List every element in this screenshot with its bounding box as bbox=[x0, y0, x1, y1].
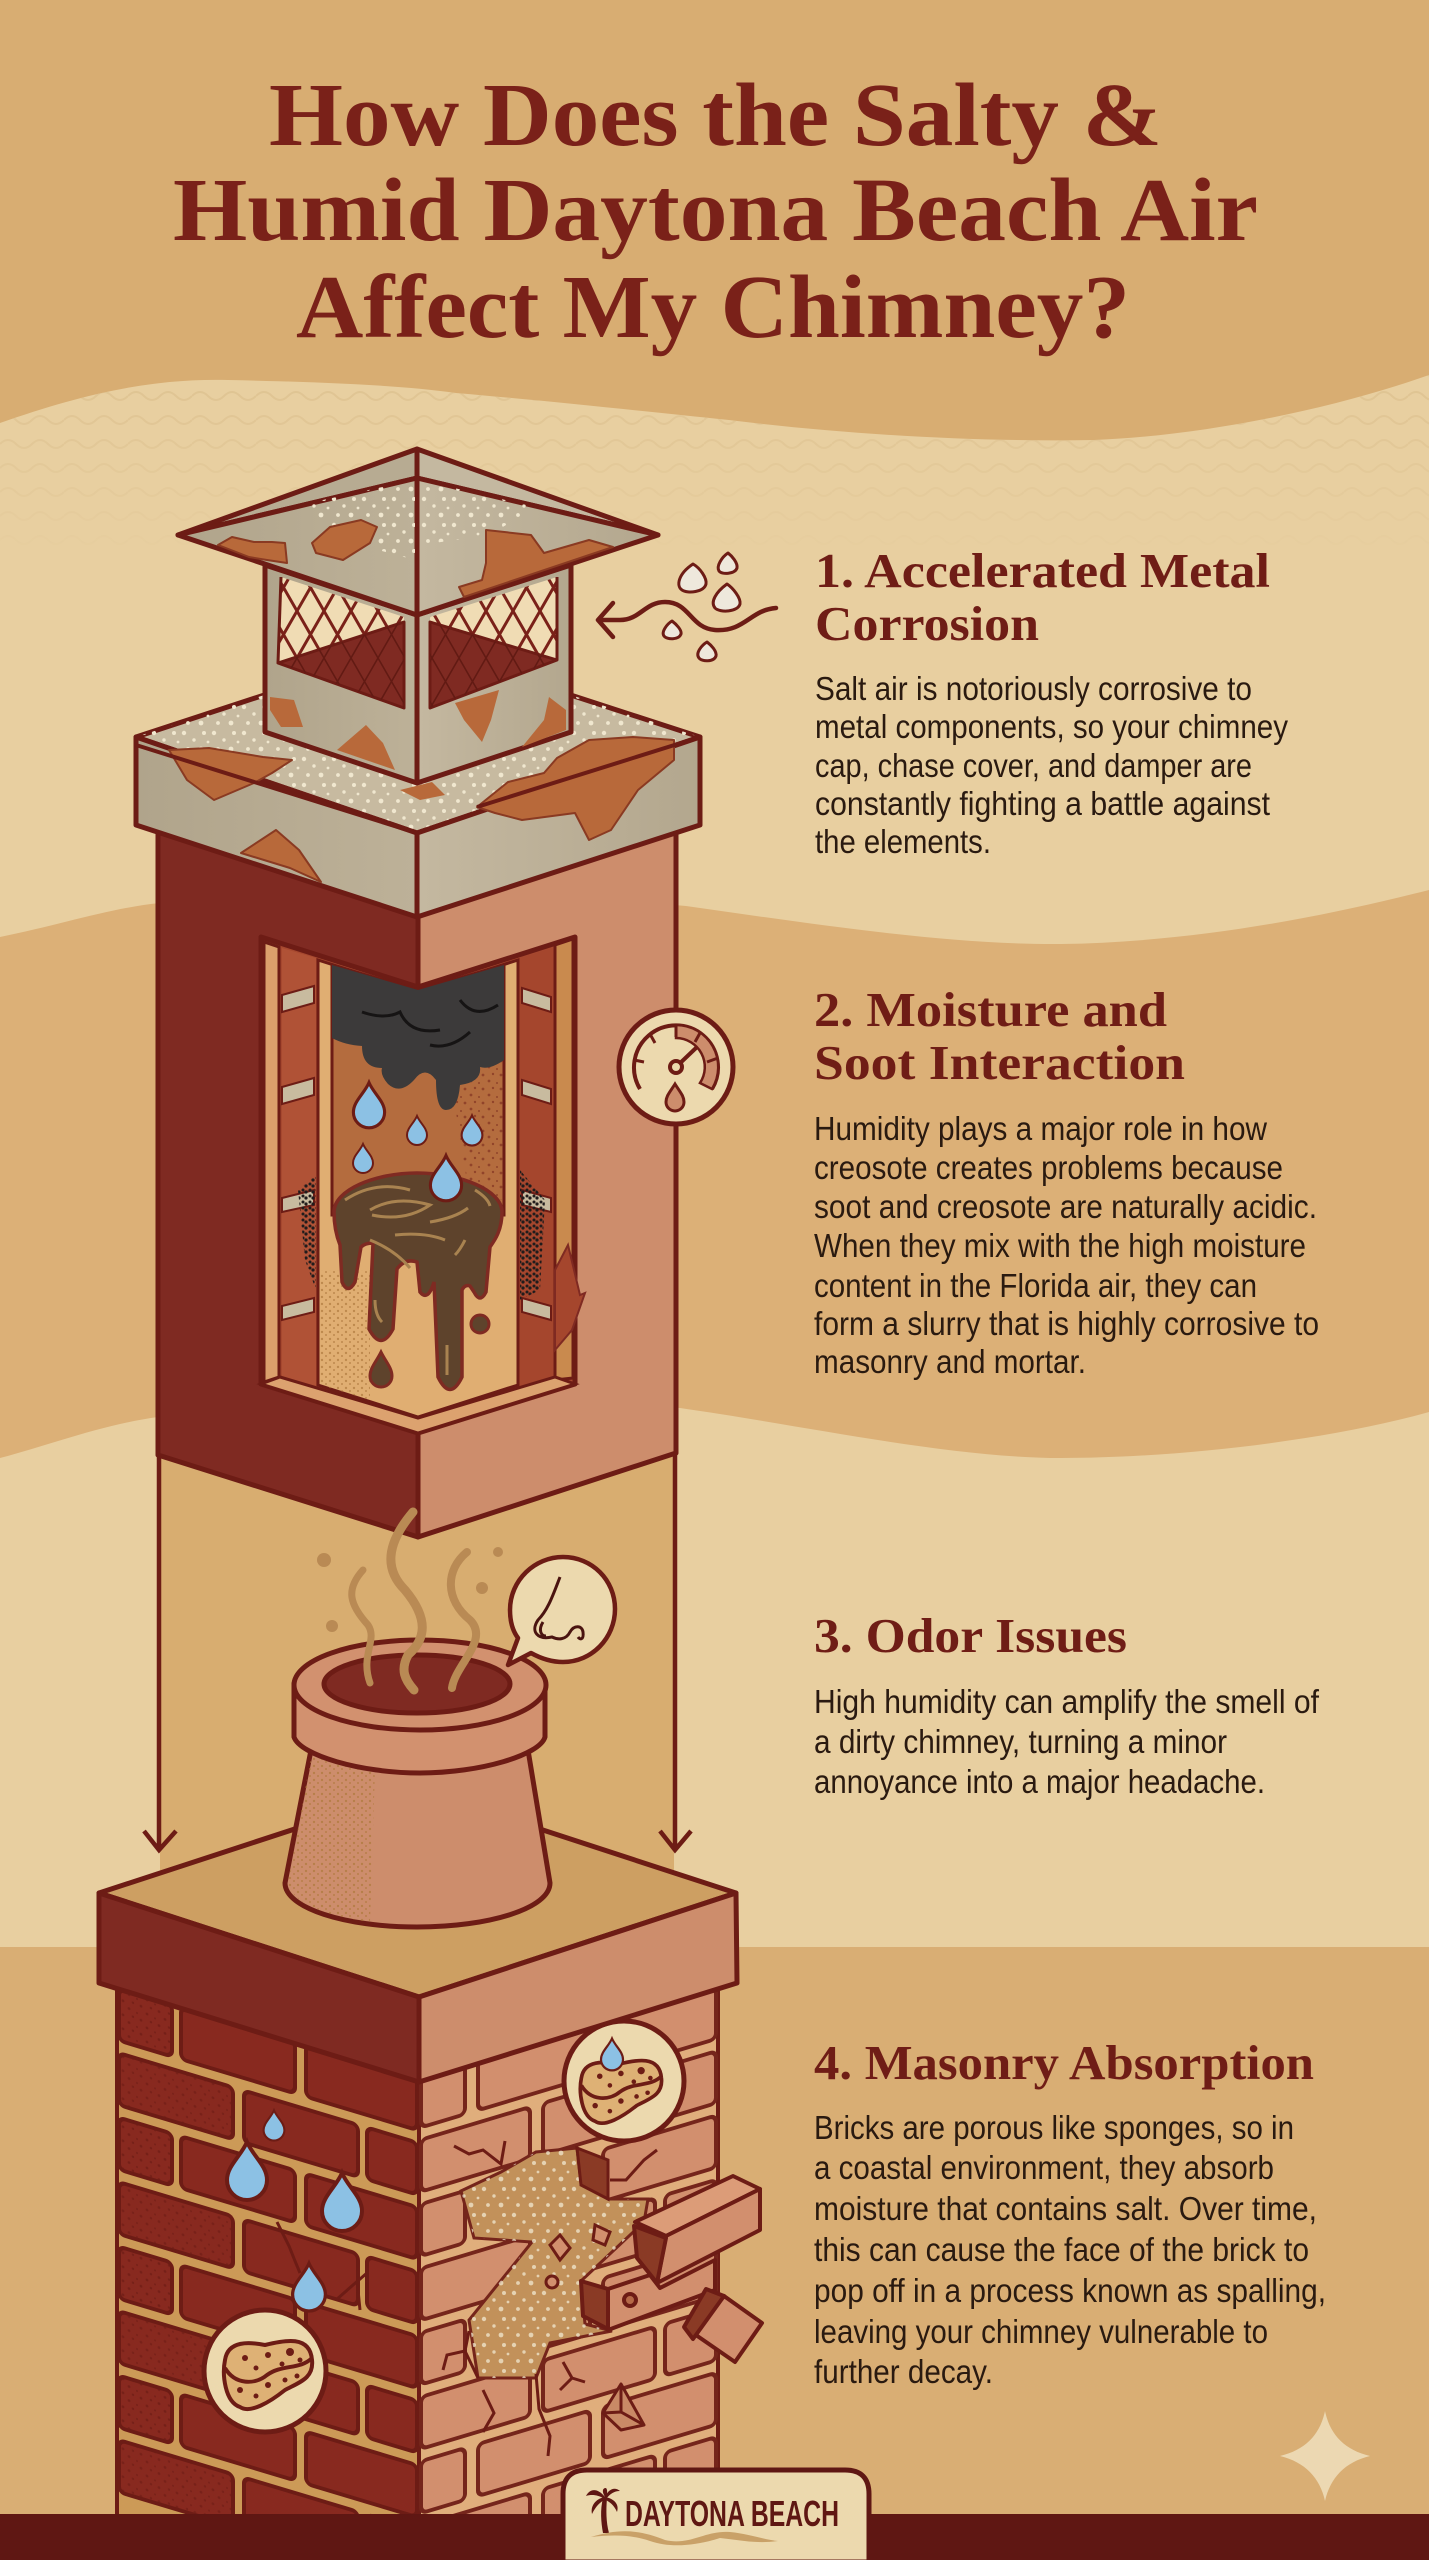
cutaway window bbox=[261, 937, 585, 1433]
icon: sparkle star bbox=[1280, 2411, 1370, 2501]
heading: Corrosion bbox=[815, 596, 1039, 651]
section 3: odor issues bbox=[814, 1608, 1320, 1800]
brand name: DAYTONA BEACH bbox=[625, 2493, 839, 2534]
body text: soot and creosote are naturally acidic. bbox=[814, 1188, 1317, 1225]
body text: constantly fighting a battle against bbox=[815, 785, 1270, 822]
popped-off brick bbox=[634, 2176, 760, 2283]
roof back faces bbox=[178, 449, 417, 535]
body text: Salt air is notoriously corrosive to bbox=[815, 670, 1252, 707]
heading bbox=[814, 982, 1185, 1090]
cracks bbox=[443, 2141, 657, 2456]
body text: creosote creates problems because bbox=[814, 1149, 1283, 1186]
body text: Bricks are porous like sponges, so in bbox=[814, 2109, 1294, 2146]
section 4: masonry absorption bbox=[814, 2035, 1326, 2390]
heading: 3. Odor Issues bbox=[814, 1608, 1127, 1663]
top surface bbox=[136, 645, 700, 833]
flue liner bbox=[318, 960, 518, 1417]
icon: nose speech bubble bbox=[508, 1557, 615, 1665]
body text: form a slurry that is highly corrosive to bbox=[814, 1305, 1319, 1342]
title bbox=[173, 66, 1258, 357]
body text: this can cause the face of the brick to bbox=[814, 2231, 1309, 2268]
body text: a coastal environment, they absorb bbox=[814, 2149, 1274, 2186]
arrow: right guide bbox=[660, 1440, 691, 1850]
body text bbox=[814, 1683, 1320, 1800]
body text: masonry and mortar. bbox=[814, 1343, 1086, 1380]
icon: humidity gauge bbox=[619, 1010, 733, 1124]
chimney cap, rusted metal bbox=[178, 449, 658, 783]
brick chip bbox=[603, 2384, 644, 2430]
side faces bbox=[136, 737, 417, 917]
cap body bbox=[265, 565, 417, 783]
body rust bbox=[270, 690, 566, 770]
body text: High humidity can amplify the smell of bbox=[814, 1683, 1320, 1720]
left vent mesh bbox=[278, 577, 404, 708]
arrow: left guide bbox=[144, 1440, 176, 1850]
damaged jamb bbox=[555, 1245, 585, 1350]
body text: cap, chase cover, and damper are bbox=[815, 747, 1252, 784]
title: Affect My Chimney? bbox=[296, 258, 1130, 357]
jambs bbox=[264, 942, 279, 1382]
icon: palm tree bbox=[586, 2488, 620, 2533]
heading: 4. Masonry Absorption bbox=[814, 2035, 1314, 2090]
sand wave bbox=[591, 2531, 778, 2545]
rust patches bbox=[169, 737, 674, 882]
footer bar bbox=[0, 2514, 1429, 2560]
heading bbox=[815, 543, 1270, 651]
heading: 1. Accelerated Metal bbox=[815, 543, 1270, 598]
body text: annoyance into a major headache. bbox=[814, 1763, 1265, 1800]
icon: sponge badge right with drop bbox=[564, 2021, 684, 2141]
logo badge bbox=[563, 2470, 869, 2560]
left brick wall bbox=[117, 1975, 419, 2560]
clay chimney pot bbox=[285, 1640, 550, 1927]
body text: leaving your chimney vulnerable to bbox=[814, 2313, 1268, 2350]
upper chimney chase bbox=[158, 830, 676, 1537]
body text: pop off in a process known as spalling, bbox=[814, 2272, 1326, 2309]
body text: moisture that contains salt. Over time, bbox=[814, 2190, 1317, 2227]
section 2: moisture and soot bbox=[814, 982, 1319, 1380]
body text: a dirty chimney, turning a minor bbox=[814, 1723, 1227, 1760]
roof rust bbox=[218, 520, 613, 597]
heading: 2. Moisture and bbox=[814, 982, 1167, 1037]
body text bbox=[814, 2109, 1326, 2390]
roof front faces bbox=[178, 478, 417, 615]
heading: Soot Interaction bbox=[814, 1035, 1185, 1090]
creosote slurry dripping bbox=[334, 1173, 502, 1390]
section 1: metal corrosion bbox=[815, 543, 1288, 860]
body text: further decay. bbox=[814, 2353, 993, 2390]
protruding brick with hole bbox=[581, 2260, 715, 2330]
spalled hole bbox=[461, 2148, 648, 2378]
chimney crown platform bbox=[99, 1789, 737, 2082]
body text: content in the Florida air, they can bbox=[814, 1267, 1257, 1304]
fallen block bbox=[684, 2289, 762, 2362]
icon: water drops on bricks bbox=[227, 2110, 362, 2311]
brick lining bbox=[282, 948, 316, 1386]
right brick wall bbox=[419, 1975, 762, 2560]
title: Humid Daytona Beach Air bbox=[173, 161, 1258, 260]
body text: the elements. bbox=[815, 823, 991, 860]
water drops bbox=[353, 1083, 482, 1173]
panel behind pot with guide arrows bbox=[144, 1400, 691, 1960]
body text bbox=[814, 1110, 1319, 1380]
chase cover, corroded metal bbox=[136, 645, 700, 917]
soot cloud bbox=[298, 965, 545, 1300]
window sill bbox=[261, 1377, 575, 1433]
right vent mesh bbox=[430, 577, 557, 708]
body text: Humidity plays a major role in how bbox=[814, 1110, 1267, 1147]
title: How Does the Salty & bbox=[269, 66, 1162, 165]
icon: sponge badge left bbox=[204, 2310, 326, 2432]
chimney base: brick masonry bbox=[117, 1975, 762, 2560]
body text bbox=[815, 670, 1288, 860]
body text: metal components, so your chimney bbox=[815, 708, 1288, 745]
body text: When they mix with the high moisture bbox=[814, 1227, 1306, 1264]
steam rising from pot bbox=[317, 1512, 503, 1690]
icon: salt air arrow bbox=[598, 553, 776, 661]
